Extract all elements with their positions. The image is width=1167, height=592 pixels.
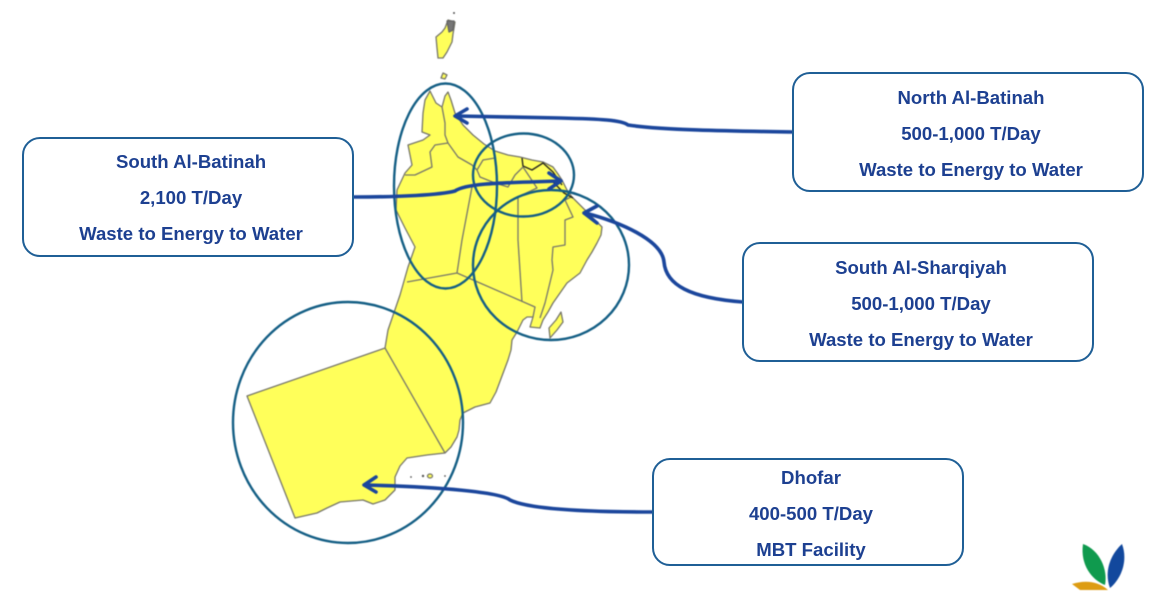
callout technology: Waste to Energy to Water: [79, 223, 303, 244]
callout technology: Waste to Energy to Water: [809, 329, 1033, 350]
callout tonnage: 400-500 T/Day: [749, 503, 873, 524]
circle: Dhofar: [233, 302, 463, 543]
logo: leaves: [1072, 544, 1124, 590]
map: dark island detail: [447, 21, 454, 32]
map: mainland outline: [247, 91, 602, 518]
map: internal borders: [385, 107, 573, 453]
logo: green leaf: [1083, 544, 1106, 585]
circle: South Al-Sharqiyah: [473, 190, 629, 340]
callout tonnage: 2,100 T/Day: [140, 187, 242, 208]
callout title: South Al-Sharqiyah: [835, 257, 1007, 278]
arrow: North Al-Batinah: [455, 109, 793, 132]
callout title: North Al-Batinah: [897, 87, 1045, 108]
callout technology: Waste to Energy to Water: [859, 159, 1083, 180]
arrow: Dhofar: [364, 477, 653, 512]
callout: Dhofar: [652, 458, 964, 566]
callout: North Al-Batinah: [792, 72, 1144, 192]
map: Musandam island: [436, 20, 455, 58]
map: Kuria Muria islands: [428, 474, 432, 478]
map: governorates: [247, 12, 602, 518]
logo: blue leaf: [1108, 544, 1124, 588]
circle: North and South Al-Batinah: [394, 84, 497, 288]
arrow: South Al-Batinah: [353, 173, 561, 197]
map: small island: [441, 73, 447, 79]
callout tonnage: 500-1,000 T/Day: [851, 293, 991, 314]
callout title: Dhofar: [781, 467, 841, 488]
callout technology: MBT Facility: [756, 539, 866, 560]
callout tonnage: 500-1,000 T/Day: [901, 123, 1041, 144]
circle: Muscat: [473, 134, 574, 216]
logo: gold leaf: [1072, 582, 1108, 590]
callout: South Al-Sharqiyah: [742, 242, 1094, 362]
callout title: South Al-Batinah: [116, 151, 266, 172]
region circles: [233, 84, 629, 543]
map: Masirah island: [549, 312, 563, 338]
arrow: South Al-Sharqiyah: [584, 206, 743, 302]
arrows: [353, 109, 793, 512]
map: dark coast border: [522, 158, 573, 198]
map: arabian sea dots: [410, 12, 455, 478]
callout: South Al-Batinah: [22, 137, 354, 257]
